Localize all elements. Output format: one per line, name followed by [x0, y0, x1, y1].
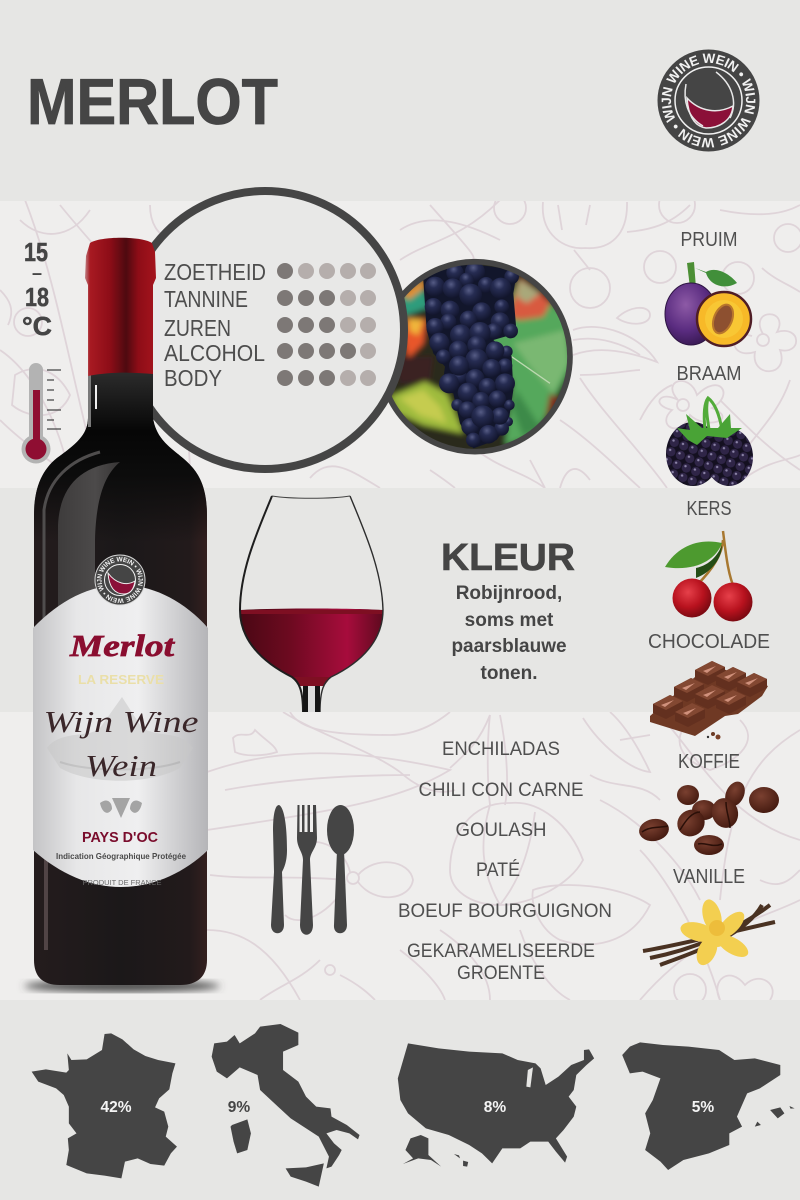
heading: colour: KLEUR: [441, 537, 575, 579]
taste labels: TANNINE: [164, 286, 248, 312]
icon: thermometer: [22, 363, 61, 464]
photo: grape cluster circle: [380, 260, 577, 457]
temperature: [22, 237, 52, 341]
food pairings: [398, 739, 612, 984]
label: chateau engraving: [47, 697, 193, 781]
patterned band: upper: [0, 201, 800, 488]
taste labels: ALCOHOL: [164, 340, 265, 366]
wine bottle: [33, 238, 208, 985]
bottle glass: [34, 280, 207, 985]
label: text: Wein: [85, 748, 157, 783]
logo: wine badge: WIJN WINE WEIN • WIJN WINE WEIN •: [662, 54, 756, 148]
label: text: PRODUIT DE FRANCE: [82, 878, 162, 887]
temperature: °C: [22, 311, 52, 341]
aroma labels: BRAAM: [676, 363, 742, 385]
icon: cutlery: [271, 805, 354, 935]
aroma labels: [648, 229, 770, 888]
colour description: tonen.: [480, 663, 538, 684]
map label: France: 42%: [100, 1099, 132, 1116]
panel: taste profile circle: [126, 191, 404, 469]
aroma labels: PRUIM: [680, 229, 738, 251]
map: Spain: [622, 1042, 795, 1170]
map: France: [32, 1033, 177, 1178]
map label: Spain: 5%: [692, 1099, 714, 1116]
food pairings: GOULASH: [456, 820, 546, 841]
taste labels: ZOETHEID: [164, 259, 266, 285]
label: text: [44, 628, 199, 887]
icon: blackberry: [666, 398, 753, 486]
label: text: Indication Géographique Protégée: [56, 851, 186, 861]
icon: cherries: [665, 531, 752, 622]
aroma labels: KOFFIE: [678, 751, 740, 773]
icon: plum: [665, 262, 751, 346]
aroma labels: KERS: [686, 498, 732, 520]
wine glass: [240, 496, 383, 712]
icon: coffee beans: [637, 778, 779, 855]
label: text: Wijn Wine: [44, 704, 199, 739]
map: USA: [398, 1043, 594, 1167]
label: grape emblem: [100, 798, 142, 818]
icon: vanilla: [643, 897, 775, 968]
aroma labels: VANILLE: [673, 866, 745, 888]
temperature: –: [32, 263, 42, 283]
label: text: PAYS D'OC: [82, 829, 158, 846]
bottle capsule: [85, 238, 156, 376]
bottle neck logo: WIJN WINE WEIN • WIJN WINE WEIN •: [96, 556, 144, 604]
colour description: paarsblauwe: [451, 636, 567, 657]
map label: Italy: 9%: [228, 1099, 250, 1116]
bottle label: [33, 585, 208, 887]
food pairings: GEKARAMELISEERDE: [407, 941, 595, 962]
food pairings: PATÉ: [476, 860, 520, 881]
label: text: Merlot: [69, 628, 176, 663]
taste rating dots: [277, 263, 376, 386]
patterned band: lower: [0, 712, 800, 1000]
temperature: 18: [25, 282, 49, 312]
food pairings: CHILI CON CARNE: [418, 780, 584, 801]
bottle shadow: [24, 980, 220, 992]
map: Italy: [212, 1024, 360, 1187]
icon: chocolate: [650, 661, 768, 740]
food pairings: ENCHILADAS: [442, 739, 560, 760]
temperature: 15: [24, 237, 48, 267]
taste labels: [164, 259, 266, 391]
food pairings: GROENTE: [457, 963, 545, 984]
title: MERLOT: [27, 65, 278, 138]
map label: USA: 8%: [484, 1099, 506, 1116]
taste labels: BODY: [164, 365, 222, 391]
aroma labels: CHOCOLADE: [648, 631, 770, 653]
colour description: soms met: [465, 610, 554, 631]
colour description: Robijnrood,: [456, 583, 562, 604]
food pairings: BOEUF BOURGUIGNON: [398, 901, 612, 922]
colour description: [451, 583, 567, 684]
taste labels: ZUREN: [164, 315, 231, 341]
label: text: LA RESERVE: [78, 672, 164, 687]
